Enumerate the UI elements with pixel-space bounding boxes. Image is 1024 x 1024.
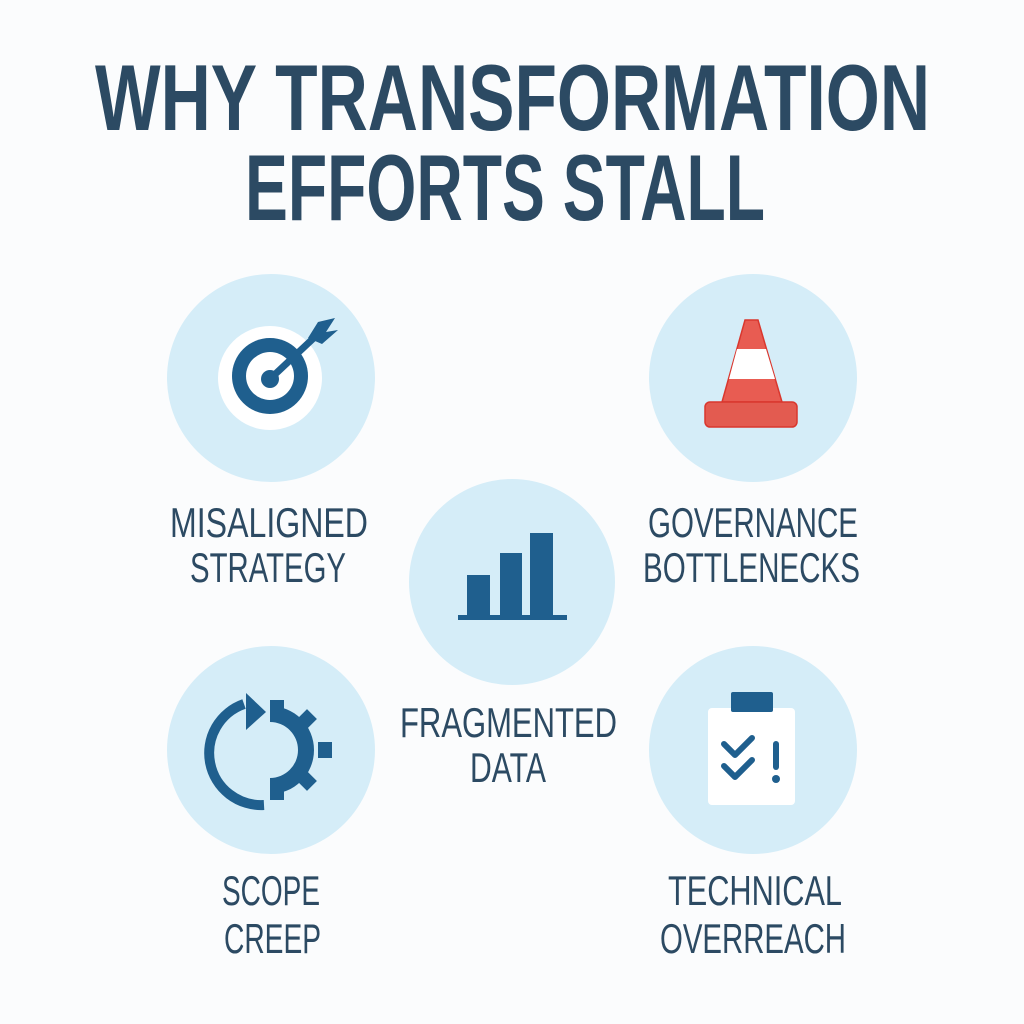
panel: governance bottlenecks (643, 274, 860, 591)
panel: scope creep: CREEP (224, 915, 321, 962)
icon: cycle gear (209, 693, 332, 805)
panel: technical overreach (649, 646, 857, 962)
label: MISALIGNED (170, 499, 368, 546)
panel: scope creep (167, 646, 375, 962)
icon: clipboard (708, 692, 795, 805)
panel: fragmented data (400, 479, 617, 791)
panel: misaligned strategy (167, 274, 375, 591)
label: FRAGMENTED (400, 699, 617, 746)
label: GOVERNANCE (648, 499, 858, 546)
label: SCOPE (222, 867, 320, 914)
icon: bar chart (458, 533, 567, 620)
icon: target (218, 318, 338, 430)
panel: technical overreach: OVERREACH (660, 915, 846, 962)
title (95, 45, 930, 240)
label: TECHNICAL (668, 867, 842, 914)
icon: traffic cone (705, 320, 797, 427)
panel: misaligned strategy: STRATEGY (190, 544, 346, 591)
panel: fragmented data: DATA (470, 744, 546, 791)
panel: governance bottlenecks: BOTTLENECKS (643, 544, 860, 591)
title: EFFORTS STALL (245, 135, 765, 240)
